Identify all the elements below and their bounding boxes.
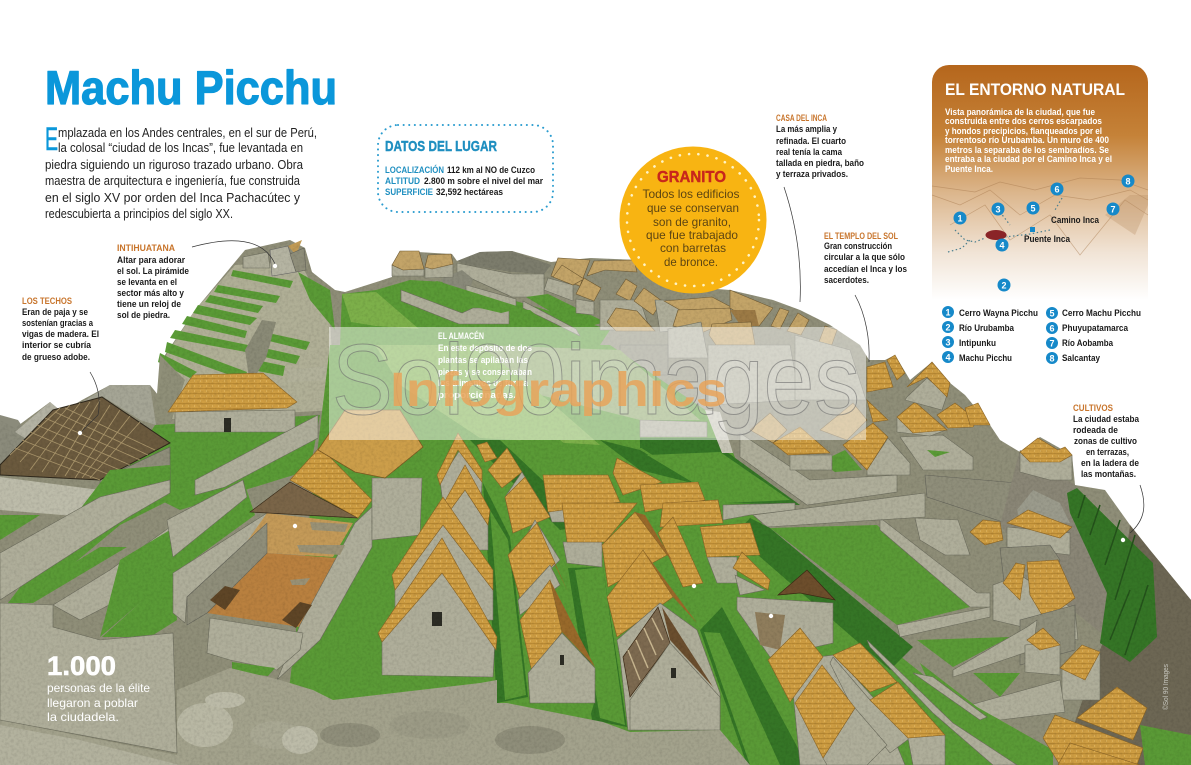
label: cultivos: en la ladera de — [1081, 458, 1139, 468]
panel description: Vista panorámica de la ciudad, que fue — [945, 107, 1095, 117]
label: intihuatana: el sol. La pirámide — [117, 266, 189, 276]
panel: datos del lugar: 32,592 hectáreas — [436, 187, 503, 197]
stat: 1.000 personas — [47, 651, 150, 724]
panel: datos del lugar — [378, 125, 553, 212]
El almacén label: los alimentos de forma — [438, 378, 528, 388]
El almacén label — [438, 331, 532, 400]
panel description: torrentoso río Urubamba. Un muro de 400 — [945, 135, 1109, 145]
label: casa del Inca: real tenía la cama — [776, 147, 843, 157]
stat: 1.000 personas: personas de la élite — [47, 681, 150, 695]
callout: granito: son de granito, — [653, 215, 731, 229]
label: el templo del sol: sacerdotes. — [824, 275, 869, 285]
callout: granito: Todos los edificios — [642, 187, 740, 201]
middle lawn terraces — [280, 345, 1000, 765]
copyright: ©Sol 90 Images — [1162, 664, 1170, 710]
panel: datos del lugar: ALTITUD — [385, 176, 420, 186]
map of surroundings: 2 — [1001, 280, 1007, 290]
upper fields, walls and rocks — [340, 251, 610, 345]
intro text: maestra de arquitectura e ingeniería, fue construida — [45, 174, 300, 188]
map of surroundings: 1 — [957, 214, 963, 224]
label: intihuatana: INTIHUATANA — [117, 243, 175, 253]
Machu Picchu marker — [986, 230, 1006, 240]
map legend: Intipunku — [959, 338, 996, 348]
label: los techos: vigas de madera. El — [22, 329, 99, 339]
label: intihuatana: sector más alto y — [117, 288, 184, 298]
map of surroundings: Camino Inca — [1051, 215, 1100, 225]
label: cultivos: las montañas. — [1081, 469, 1136, 479]
house with exposed roof structure — [0, 397, 170, 540]
terrain silhouette — [0, 240, 1191, 765]
terraced hill with Intihuatana — [155, 262, 335, 425]
panel: datos del lugar: SUPERFICIE — [385, 187, 433, 197]
panel: datos del lugar: 112 km al NO de Cuzco — [447, 165, 535, 175]
map legend: 3 — [945, 338, 951, 348]
watermark band — [329, 324, 866, 440]
map legend — [942, 306, 1141, 364]
callout: granito — [620, 146, 766, 294]
label: el templo del sol — [824, 231, 907, 362]
green strips between houses — [483, 483, 627, 727]
label: casa del Inca: tallada en piedra, baño — [776, 158, 864, 168]
map of surroundings: 6 — [1054, 184, 1060, 194]
label: cultivos: La ciudad estaba — [1073, 414, 1140, 424]
panel: el entorno natural: EL ENTORNO NATURAL — [945, 80, 1125, 99]
intro text: en el siglo XV por orden del Inca Pachacútec y — [45, 191, 301, 205]
El almacén label: piezas y se conservaban — [438, 367, 532, 377]
map legend: Machu Picchu — [959, 353, 1012, 363]
label: intihuatana: Altar para adorar — [117, 255, 185, 265]
label: los techos: interior se cubría — [22, 340, 92, 350]
map legend: 8 — [1049, 354, 1055, 364]
label: casa del Inca: La más amplia y — [776, 124, 837, 134]
label: casa del Inca: refinada. El cuarto — [776, 136, 846, 146]
panel description: y hondos precipicios, flanqueados por el — [945, 126, 1102, 136]
label: el templo del sol: accedían el Inca y los — [824, 264, 907, 274]
foreground stonework — [0, 603, 750, 765]
El almacén label: En este depósito de dos — [438, 343, 532, 353]
map of surroundings: 3 — [995, 204, 1001, 214]
El almacén label: EL ALMACÉN — [438, 331, 484, 341]
stone texture overlay — [0, 230, 1191, 765]
stat: 1.000 personas: 1.000 — [47, 651, 116, 681]
label: los techos: de grueso adobe. — [22, 352, 90, 362]
intro text: la colosal “ciudad de los Incas”, fue levantada en — [58, 141, 303, 155]
panel description: entraba a la ciudad por el Camino Inca y el — [945, 154, 1112, 164]
terraced crops on the right — [1000, 450, 1191, 765]
callout: granito: con barretas — [660, 241, 726, 255]
map legend: 2 — [945, 322, 951, 332]
upper houses — [392, 251, 866, 405]
map of surroundings — [932, 174, 1148, 292]
white markers on illustration — [293, 524, 773, 618]
label: intihuatana: se levanta en el — [117, 277, 177, 287]
label: los techos: LOS TECHOS — [22, 296, 72, 306]
rocks on the left — [0, 385, 156, 470]
label: cultivos: en terrazas, — [1086, 447, 1129, 457]
illustration: citadel of Machu Picchu — [0, 230, 1191, 765]
map of surroundings: 7 — [1110, 204, 1116, 214]
label: casa del Inca — [776, 113, 864, 302]
Intihuatana structure — [243, 240, 306, 276]
label: el templo del sol: Gran construcción — [824, 241, 892, 251]
foreground green — [313, 547, 500, 705]
label: casa del Inca: CASA DEL INCA — [776, 113, 827, 123]
stat: 1.000 personas: llegaron a poblar — [47, 696, 138, 710]
bottom right roofs — [768, 628, 945, 765]
map legend: 4 — [945, 352, 951, 362]
label: cultivos — [1073, 403, 1144, 542]
map legend: 1 — [945, 308, 951, 318]
map legend: 6 — [1049, 324, 1055, 334]
callout: granito: GRANITO — [657, 169, 726, 186]
label: intihuatana: tiene un reloj de — [117, 299, 181, 309]
right hillside buildings — [915, 438, 1100, 720]
callout: granito: que se conservan — [647, 201, 739, 215]
label: los techos — [22, 296, 99, 435]
map of surroundings: 8 — [1125, 176, 1131, 186]
map of surroundings: 5 — [1030, 204, 1036, 214]
intro text: redescubierta a principios del siglo XX. — [45, 207, 233, 221]
map of surroundings: 4 — [999, 240, 1005, 250]
map legend: 5 — [1049, 308, 1055, 318]
storehouse with open interior — [173, 447, 372, 680]
label: cultivos: rodeada de — [1073, 425, 1118, 435]
map legend: Salcantay — [1062, 353, 1100, 363]
panel: datos del lugar: 2.800 m sobre el nivel del mar — [424, 176, 543, 186]
panel: el entorno natural — [932, 65, 1148, 364]
upper right houses — [750, 355, 990, 475]
callout: granito: de bronce. — [664, 255, 718, 269]
tall house behind the storehouse — [318, 410, 423, 540]
El almacén label: plantas se apilaban las — [438, 355, 528, 365]
watermark outline text: Sol90images — [332, 324, 860, 436]
label: los techos: sostenían gracias a — [22, 318, 94, 328]
central houses, column C — [543, 458, 770, 730]
central green strips and small ruin — [700, 570, 1017, 765]
label: casa del Inca: y terraza privados. — [776, 169, 848, 179]
map legend: 7 — [1049, 338, 1055, 348]
right green lawn — [735, 518, 1020, 697]
title: Machu Picchu — [45, 61, 337, 114]
Inca trail — [948, 198, 1062, 252]
central gabled houses, column A — [378, 433, 497, 677]
panel description: metros la separaba de los sembradíos. Se — [945, 145, 1109, 155]
bottom right buildings — [913, 663, 1191, 765]
map legend: Phuyupatamarca — [1062, 323, 1129, 333]
label: los techos: Eran de paja y se — [22, 307, 88, 317]
stat: 1.000 personas: la ciudadela. — [47, 710, 119, 724]
panel description — [945, 107, 1112, 174]
label: intihuatana: sol de piedra. — [117, 310, 170, 320]
intro text: mplazada en los Andes centrales, en el sur de Perú, — [58, 126, 317, 140]
watermark orange text: Infographics — [390, 364, 727, 417]
panel: datos del lugar: LOCALIZACIÓN — [385, 164, 444, 175]
map legend: Cerro Machu Picchu — [1062, 308, 1141, 318]
map of surroundings: Puente Inca — [1024, 234, 1071, 244]
intro text — [45, 121, 317, 221]
callout: granito: que fue trabajado — [646, 228, 738, 242]
left stone walls and terraces — [0, 465, 255, 637]
map legend: Río Urubamba — [959, 323, 1015, 333]
upper right compound walls — [723, 433, 1017, 527]
label: intihuatana — [117, 241, 277, 320]
panel: datos del lugar: DATOS DEL LUGAR — [385, 139, 497, 155]
label: el templo del sol: circular a la que sólo — [824, 252, 905, 262]
label: cultivos: zonas de cultivo — [1074, 436, 1137, 446]
El almacén label: proporcionadas. — [438, 390, 516, 400]
panel description: Puente Inca. — [945, 164, 993, 174]
left lawn and tan house — [120, 373, 320, 510]
intro text: piedra siguiendo un riguroso trazado urbano. Obra — [45, 158, 303, 172]
map legend: Cerro Wayna Picchu — [959, 308, 1038, 318]
map legend: Río Aobamba — [1062, 338, 1114, 348]
intro text: E — [45, 121, 58, 157]
label: cultivos: CULTIVOS — [1073, 403, 1113, 413]
central gabled houses, column B — [488, 448, 595, 703]
label: el templo del sol: EL TEMPLO DEL SOL — [824, 231, 898, 241]
panel description: construida entre dos cerros escarpados — [945, 116, 1102, 126]
